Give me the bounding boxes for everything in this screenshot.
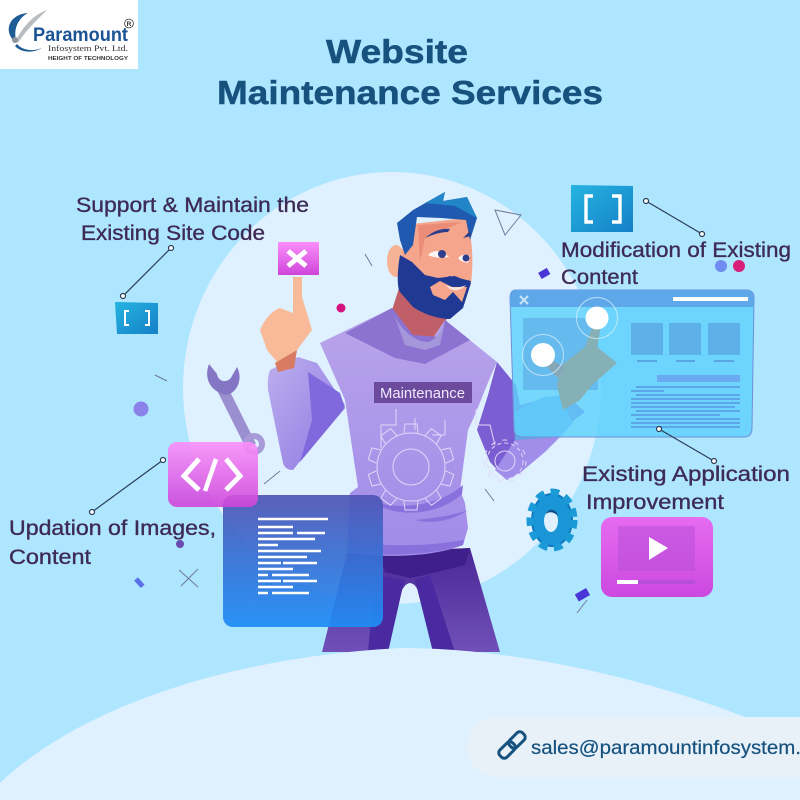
browser window: [510, 290, 754, 437]
icon: bracket large: [571, 185, 633, 232]
title: Maintenance Services: [217, 74, 603, 111]
sweater label: Maintenance: [380, 385, 465, 402]
label: updation: [9, 517, 216, 569]
label: updation: Content: [9, 546, 91, 569]
icon: pink close button: [278, 242, 319, 275]
arm gear: [484, 440, 526, 482]
label: application: Improvement: [586, 491, 724, 514]
code box: [168, 442, 258, 507]
logo: HEIGHT OF TECHNOLOGY: [48, 56, 129, 62]
connector lines: [90, 198, 716, 514]
email: sales@paramountinfosystem.: [531, 738, 800, 759]
pants: [322, 548, 500, 652]
person: [260, 192, 585, 652]
logo: [0, 0, 138, 69]
circuit lines: [381, 409, 495, 448]
label: support: Existing Site Code: [81, 222, 265, 245]
viewer-right arm: [477, 362, 585, 480]
hand pointing ghost: [557, 322, 617, 410]
beard: [398, 255, 471, 319]
bottom hill: [0, 648, 800, 800]
pants waist: [380, 548, 470, 578]
icon: bracket small: [115, 302, 158, 334]
wrist: [275, 350, 297, 372]
eyebrows and eyes: [425, 229, 471, 238]
torso folds: [347, 485, 468, 554]
logo: R: [127, 21, 132, 28]
chest gear: [368, 424, 454, 510]
video card: [601, 517, 713, 597]
logo: Paramount: [33, 24, 128, 46]
cheek blush: [418, 222, 462, 262]
logo: Infosystem Pvt. Ltd.: [48, 43, 128, 53]
collar: [345, 308, 470, 364]
background circle: [183, 172, 601, 604]
label: modification: Modification of Existing: [561, 239, 791, 262]
neck: [392, 285, 447, 340]
viewer-left arm: [268, 357, 345, 470]
label: modification: [561, 239, 791, 289]
torso: [320, 308, 497, 556]
title: Website: [326, 33, 468, 70]
label: updation: Updation of Images,: [9, 517, 216, 540]
raised hand: [260, 277, 312, 362]
label: support: Support & Maintain the: [76, 194, 309, 217]
contact pill: [467, 717, 800, 777]
mustache and lip: [438, 276, 471, 287]
icon: link: [497, 730, 527, 760]
code document panel: [223, 495, 383, 627]
lower forearm: [495, 437, 560, 480]
face: [402, 218, 472, 305]
decorative shapes: [134, 210, 745, 613]
title: [217, 33, 603, 111]
label: modification: Content: [561, 266, 638, 289]
ear: [387, 245, 405, 277]
chin patch: [430, 281, 468, 302]
label: support: [76, 194, 309, 245]
label: application: [582, 463, 790, 514]
touch points: [531, 343, 555, 367]
icon: wrench: [207, 364, 262, 452]
label: application: Existing Application: [582, 463, 790, 486]
icon: blue gear: [531, 493, 573, 547]
sleeve over the screen: [513, 396, 573, 440]
sleeve fold: [300, 372, 345, 462]
hair: [397, 192, 477, 255]
pants inner shade: [368, 575, 455, 652]
